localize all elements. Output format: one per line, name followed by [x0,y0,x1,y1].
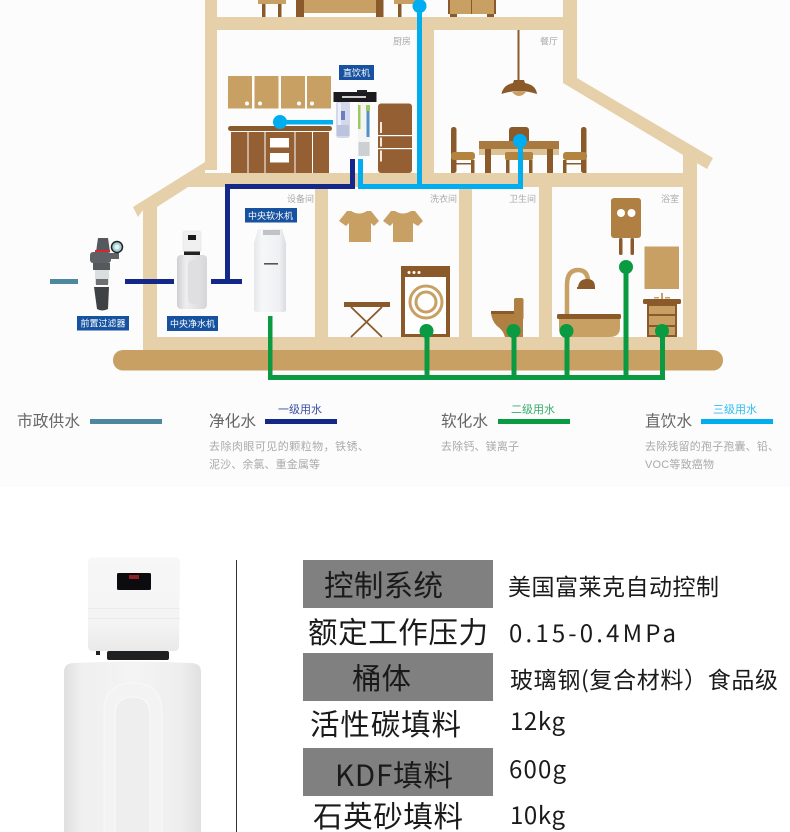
toilet [491,298,524,337]
dining table and chairs [451,127,587,173]
laundry: shirts [339,211,423,242]
spec row: activated carbon [310,702,565,744]
refrigerator [378,104,412,173]
legend: direct drinking water [645,403,779,471]
spec row: tank [303,653,778,701]
house structure [133,0,713,350]
label: direct drinking machine [339,65,374,80]
spec row: rated pressure: 额定工作压力 [308,610,488,652]
laundry: ironing board [344,302,390,337]
legend: municipal water: 市政供水 [17,412,80,430]
municipal pipe [50,279,78,284]
direct drinking water pipes [273,0,527,189]
spec row: control system: 美国富莱克自动控制 [508,568,719,602]
spec row: activated carbon: 12kg [510,702,565,737]
spec row: KDF [303,748,566,796]
room labels [287,36,679,204]
spec row: rated pressure: 0.15-0.4MPa [509,614,676,649]
spec row: tank: 玻璃钢(复合材料）食品级 [510,661,778,695]
legend: direct drinking water: VOC等致癌物 [645,457,714,471]
upper floor furniture [258,0,496,17]
water heater [611,198,641,255]
vertical divider [236,560,237,832]
legend: purified water: 一级用水 [278,403,322,416]
legend: softened water: 去除钙、镁离子 [441,439,519,453]
room labels: 设备间 [287,193,314,204]
bathroom vanity [643,293,681,337]
label: central purifier: 中央净水机 [170,318,215,329]
label: pre-filter [77,316,129,330]
legend: softened water [441,403,570,453]
room labels: 浴室 [661,193,679,204]
spec row: quartz sand [313,794,565,832]
spec row: rated pressure [308,610,676,652]
legend: purified water: 泥沙、余氯、重金属等 [209,457,320,471]
bathroom mirror [644,246,679,289]
label: pre-filter: 前置过滤器 [80,318,126,328]
spec row: KDF: KDF填料 [335,753,453,795]
kitchen cabinets [228,76,332,173]
label: direct drinking machine: 直饮机 [343,67,370,78]
central softener [254,229,286,312]
legend: purified water: 净化水 [209,412,256,430]
product photo: softener tank [64,558,201,832]
softened water pipes [268,260,669,380]
legend: direct drinking water: 三级用水 [713,403,757,416]
spec table [303,560,778,832]
foundation [113,350,723,370]
legend: direct drinking water: 直饮水 [645,412,692,430]
pre-filter [90,238,122,310]
room labels: 餐厅 [540,36,558,46]
legend: purified water: 去除肉眼可见的颗粒物，铁锈、 [209,439,369,453]
room labels: 厨房 [393,36,411,46]
spec row: quartz sand: 10kg [510,796,565,831]
purified water pipes [125,159,355,284]
legend: purified water [209,403,369,471]
legend: municipal water [17,412,162,430]
spec row: control system [303,560,719,608]
label: central softener [245,208,297,222]
dining pendant lamp [502,30,537,96]
central water purifier [177,231,207,309]
label: central softener: 中央软水机 [248,210,293,221]
legend: direct drinking water: 去除残留的孢子孢囊、铅、 [645,439,779,453]
spec row: control system: 控制系统 [324,563,443,605]
label: central purifier [167,316,218,331]
spec row: tank: 桶体 [352,656,411,698]
spec row: activated carbon: 活性碳填料 [310,702,461,744]
bathtub and shower [557,270,621,337]
laundry: washing machine [401,266,450,337]
legend: softened water: 二级用水 [511,403,555,416]
room labels: 洗衣间 [430,193,457,204]
legend: softened water: 软化水 [441,412,488,430]
direct drinking water machine [334,90,376,156]
spec row: KDF: 600g [509,750,566,785]
room labels: 卫生间 [509,193,536,204]
